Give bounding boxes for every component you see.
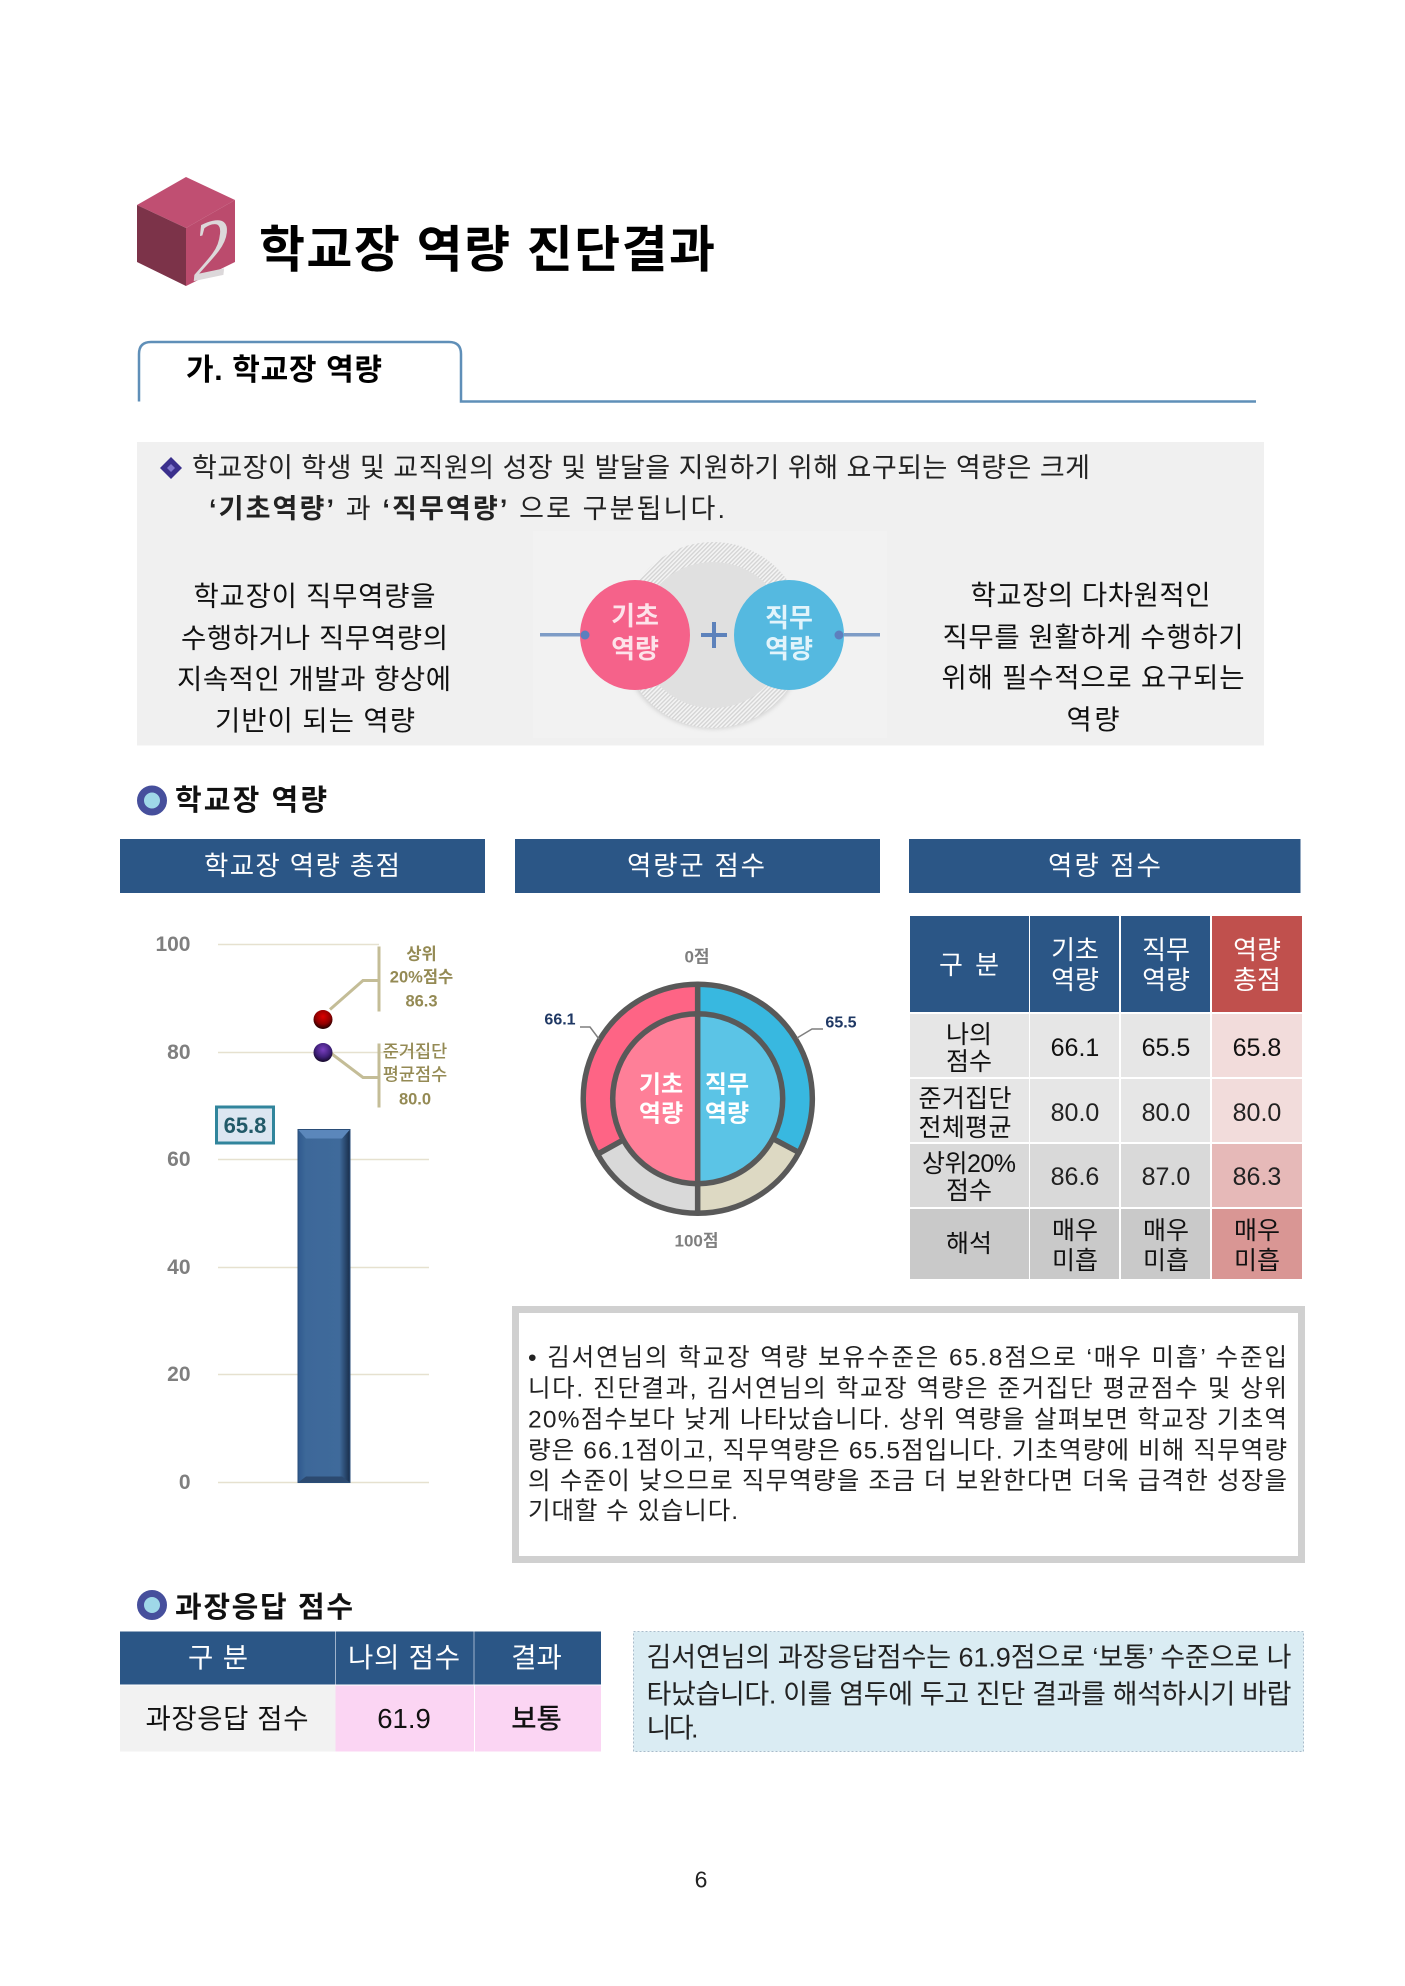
- diagram: basic + job competency: [533, 531, 887, 738]
- panel: interpretation text: 니다. 진단결과, 김서연님의 학교장 역량은 준거집단 평균점수 및 상위: [528, 1374, 1287, 1402]
- text: basic competency description: 수행하거나 직무역량의: [181, 622, 448, 654]
- center labels: 역량: [705, 1100, 749, 1128]
- table header text: 총점: [1233, 965, 1281, 995]
- panel: interpretation text: [516, 1310, 1302, 1560]
- diagram: basic + job competency: 직무: [765, 603, 813, 633]
- axis labels: 20: [167, 1363, 190, 1386]
- marker: top 20%: 86.3: [405, 992, 438, 1010]
- intro text: 학교장이 학생 및 교직원의 성장 및 발달을 지원하기 위해 요구되는 역량은 크게: [192, 453, 1090, 483]
- page number: 6: [695, 1866, 707, 1892]
- table body text: 미흡: [1143, 1247, 1189, 1275]
- table body text: 미흡: [1052, 1247, 1098, 1275]
- table header text: [939, 935, 1281, 995]
- table header text: 역량: [1233, 935, 1281, 965]
- value label: 65.8: [224, 1113, 266, 1138]
- callout: exaggerated response note: 타났습니다. 이를 염두에 두고 진단 결과를 해석하시기 바랍: [646, 1680, 1292, 1710]
- table body text: 65.5: [1142, 1034, 1190, 1062]
- diagram: basic + job competency: 역량: [611, 634, 659, 664]
- marker: top 20%: 20%점수: [390, 968, 453, 986]
- intro text: [192, 453, 1090, 524]
- axis labels: 40: [167, 1256, 190, 1279]
- table body text: 80.0: [1142, 1099, 1190, 1127]
- text: basic competency description: 학교장이 직무역량을: [194, 580, 436, 612]
- center labels: 역량: [639, 1100, 683, 1128]
- bar: 65.8: [298, 1130, 350, 1482]
- table: competency scores: [910, 916, 1302, 1279]
- table body text: 해석: [946, 1230, 992, 1258]
- table: exaggerated response score: 61.9: [377, 1703, 431, 1734]
- table header text: 역량: [1142, 965, 1190, 995]
- heading: 학교장 역량: 학교장 역량: [175, 784, 327, 817]
- scale labels: 0점: [684, 948, 710, 966]
- axis labels: 100: [155, 933, 190, 956]
- table body text: 80.0: [1233, 1099, 1281, 1127]
- marker: reference group: 80.0: [399, 1090, 431, 1108]
- text: job competency description: 역량: [1066, 704, 1120, 735]
- marker: top 20%: [314, 944, 453, 1029]
- table body text: 전체평균: [918, 1114, 1012, 1142]
- bar chart: total score: [155, 933, 453, 1494]
- icon: diamond bullet: [160, 457, 182, 479]
- diagram: basic + job competency: 기초: [611, 601, 659, 631]
- heading: 과장응답 점수: 과장응답 점수: [175, 1591, 353, 1624]
- section tab: 가. 학교장 역량: [139, 342, 1256, 402]
- panel header: total score: [120, 839, 485, 893]
- callout: exaggerated response note: [634, 1632, 1304, 1752]
- axis labels: 60: [167, 1148, 190, 1171]
- table body text: 매우: [1052, 1217, 1098, 1245]
- callout: exaggerated response note: 김서연님의 과장응답점수는 61.9점으로 ‘보통’ 수준으로 나: [646, 1642, 1292, 1672]
- icon: numbered cube: [137, 177, 235, 301]
- value callouts: [544, 1012, 857, 1039]
- table body text: 86.3: [1233, 1163, 1281, 1191]
- icon: numbered cube: 2: [189, 196, 235, 301]
- panel header: group score: 역량군 점수: [627, 851, 765, 881]
- marker: reference group: [314, 1042, 447, 1108]
- diagram: basic + job competency: 역량: [765, 634, 813, 664]
- table body text: 87.0: [1142, 1163, 1190, 1191]
- panel: interpretation text: 20%점수보다 낮게 나타났습니다. 상위 역량을 살펴보면 학교장 기초역: [528, 1406, 1287, 1434]
- table: exaggerated response score: 보통: [511, 1703, 562, 1734]
- text: basic competency description: 기반이 되는 역량: [215, 705, 415, 736]
- panel: interpretation text: • 김서연님의 학교장 역량 보유수준은 65.8점으로 ‘매우 미흡’ 수준입: [528, 1344, 1287, 1372]
- center labels: [639, 1072, 749, 1128]
- panel header: competency score: [909, 839, 1300, 893]
- center labels: 기초: [639, 1072, 683, 1098]
- axis labels: [155, 933, 190, 1494]
- callout: exaggerated response note: 니다.: [646, 1714, 698, 1744]
- value label: [216, 1107, 274, 1143]
- axis labels: 0: [179, 1471, 190, 1494]
- text: basic competency description: [177, 580, 451, 736]
- marker: reference group: 준거집단: [383, 1042, 447, 1062]
- center labels: 직무: [705, 1072, 749, 1098]
- table body text: 66.1: [1051, 1034, 1099, 1062]
- marker: top 20%: 상위: [406, 944, 437, 964]
- marker: reference group: 평균점수: [383, 1064, 447, 1084]
- table header text: 역량: [1051, 965, 1099, 995]
- panel: competency intro: [137, 442, 1264, 746]
- table body text: 준거집단: [918, 1085, 1012, 1113]
- table body text: 65.8: [1233, 1034, 1281, 1062]
- panel header: total score: 학교장 역량 총점: [204, 851, 400, 881]
- text: basic competency description: 지속적인 개발과 향상에: [177, 664, 451, 694]
- table: exaggerated response score: 구 분: [188, 1642, 248, 1673]
- table body text: 86.6: [1051, 1163, 1099, 1191]
- value callouts: 66.1: [544, 1012, 576, 1028]
- title: 학교장 역량 진단결과: [259, 222, 715, 278]
- panel: interpretation text: 량은 66.1점이고, 직무역량은 65.5점입니다. 기초역량에 비해 직무역량: [528, 1436, 1287, 1464]
- text: job competency description: 학교장의 다차원적인: [970, 580, 1210, 610]
- panel header: group score: [515, 839, 880, 893]
- table body text: 80.0: [1051, 1099, 1099, 1127]
- axis labels: 80: [167, 1041, 190, 1064]
- table body text: [918, 1021, 1281, 1275]
- table body text: 매우: [1143, 1217, 1189, 1245]
- panel: interpretation text: 의 수준이 낮으므로 직무역량을 조금 더 보완한다면 더욱 급격한 성장을: [528, 1467, 1287, 1495]
- table body text: 미흡: [1234, 1247, 1280, 1275]
- section tab: 가. 학교장 역량: 가. 학교장 역량: [186, 354, 382, 387]
- table body text: 상위20%: [922, 1150, 1016, 1178]
- donut chart: group score: [544, 948, 857, 1250]
- table body text: 나의: [946, 1021, 992, 1049]
- table body text: 점수: [946, 1048, 992, 1076]
- table header text: 직무: [1142, 935, 1190, 965]
- table body text: 매우: [1234, 1217, 1280, 1245]
- table: exaggerated response score: 과장응답 점수: [146, 1703, 308, 1734]
- table: exaggerated response score: 나의 점수: [348, 1642, 460, 1673]
- value callouts: 65.5: [825, 1014, 857, 1032]
- text: job competency description: 직무를 원활하게 수행하기: [942, 622, 1244, 652]
- table header text: 기초: [1051, 935, 1099, 965]
- donut chart: group score: 100점: [674, 1232, 719, 1250]
- table: exaggerated response score: [120, 1632, 601, 1752]
- table body text: 점수: [946, 1177, 992, 1205]
- panel header: competency score: 역량 점수: [1048, 851, 1161, 881]
- text: job competency description: 위해 필수적으로 요구되는: [942, 662, 1244, 693]
- intro text: ‘기초역량’ 과 ‘직무역량’ 으로 구분됩니다.: [209, 494, 725, 524]
- table: exaggerated response score: 결과: [511, 1642, 562, 1673]
- panel: interpretation text: 기대할 수 있습니다.: [528, 1497, 738, 1525]
- text: job competency description: [942, 580, 1244, 735]
- table header text: 구 분: [939, 950, 999, 980]
